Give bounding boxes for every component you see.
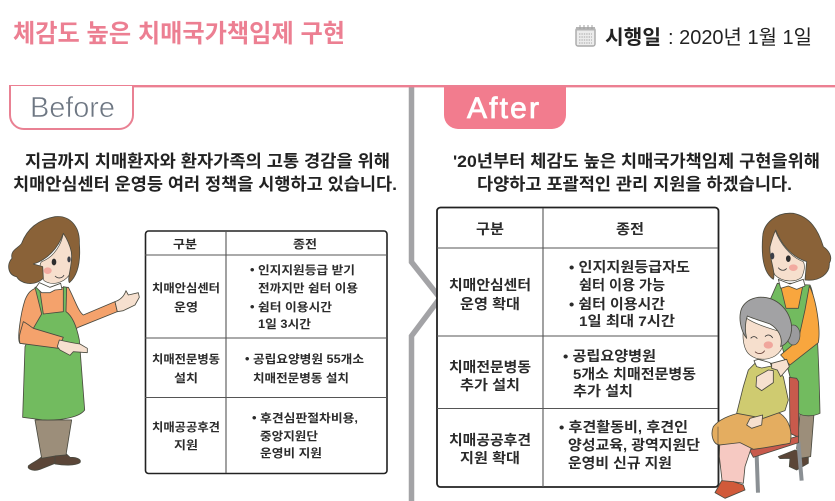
title: 체감도 높은 치매국가책임제 구현 — [13, 20, 345, 48]
row: dementia hospital addition: 5개소 치매전문병동 — [573, 366, 696, 382]
row: dementia centre expansion: • 쉼터 이용시간 — [569, 296, 665, 312]
effective date — [576, 25, 812, 49]
row: public guardianship: 중앙지원단 — [260, 429, 318, 443]
row: dementia centre: 운영 — [174, 301, 198, 314]
before intro text: 지금까지 치매환자와 환자가족의 고통 경감을 위해 — [25, 152, 390, 171]
row: dementia hospital addition — [449, 348, 696, 399]
row: dementia hospital: 치매전문병동 — [152, 352, 220, 366]
row: dementia hospital addition: 치매전문병동 — [449, 359, 531, 375]
row: public guardianship expansion — [449, 419, 700, 471]
row: public guardianship: • 후견심판절차비용, — [252, 411, 358, 425]
row: public guardianship expansion: 양성교육, 광역지원단 — [568, 437, 700, 453]
divider: gray arrow line — [412, 87, 440, 501]
before tab — [10, 86, 133, 129]
after tab — [444, 87, 566, 129]
row: dementia centre: 1일 3시간 — [258, 317, 311, 331]
row: dementia centre: • 쉼터 이용시간 — [250, 301, 332, 314]
effective date: 시행일 — [605, 26, 661, 49]
after intro text: '20년부터 체감도 높은 치매국가책임제 구현을위해 — [453, 152, 820, 171]
row: dementia hospital addition: 추가 설치 — [460, 377, 520, 393]
effective date: : 2020년 1월 1일 — [668, 26, 812, 49]
row: public guardianship expansion: 운영비 신규 지원 — [568, 455, 672, 471]
row: dementia hospital: 설치 — [174, 372, 198, 385]
row: dementia centre expansion: 운영 확대 — [460, 296, 520, 312]
row: public guardianship: 운영비 지원 — [260, 446, 322, 460]
after intro text: 다양하고 포괄적인 관리 지원을 하겠습니다. — [477, 175, 792, 194]
row: dementia centre: • 인지지원등급 받기 — [250, 263, 355, 277]
row: dementia hospital addition: 추가 설치 — [573, 383, 633, 399]
row: dementia centre: 치매안심센터 — [152, 281, 220, 295]
before table header — [173, 238, 317, 251]
after tab: After — [467, 92, 539, 125]
icon: calendar — [576, 25, 595, 46]
row: dementia hospital: • 공립요양병원 55개소 — [245, 352, 364, 366]
row: dementia hospital: 치매전문병동 설치 — [253, 371, 349, 385]
row: public guardianship expansion: • 후견활동비, 후견인 — [559, 419, 688, 435]
before intro text — [13, 152, 397, 194]
after intro text — [453, 152, 820, 194]
row: dementia centre — [152, 263, 358, 331]
row: dementia centre expansion: • 인지지원등급자도 — [569, 259, 690, 275]
before tab: Before — [30, 92, 115, 124]
row: public guardianship — [152, 411, 358, 460]
after table — [437, 208, 718, 487]
after table header: 종전 — [616, 221, 644, 237]
after table header — [476, 221, 644, 237]
row: dementia centre: 전까지만 쉼터 이용 — [258, 281, 358, 295]
row: dementia centre expansion — [449, 259, 690, 329]
row: public guardianship: 지원 — [174, 438, 198, 452]
row: public guardianship expansion: 치매공공후견 — [449, 432, 531, 448]
row: dementia hospital — [152, 352, 364, 385]
before table — [145, 231, 387, 474]
illustration: caregiver with elderly woman on chair — [712, 213, 831, 498]
before table header: 구분 — [173, 238, 197, 251]
row: dementia hospital addition: • 공립요양병원 — [563, 348, 656, 364]
row: dementia centre expansion: 쉼터 이용 가능 — [579, 277, 665, 293]
row: public guardianship expansion: 지원 확대 — [460, 450, 520, 466]
header rule — [9, 85, 835, 87]
row: dementia centre expansion: 1일 최대 7시간 — [579, 313, 675, 329]
row: public guardianship: 치매공공후견 — [152, 420, 220, 434]
illustration: presenting caregiver — [9, 217, 139, 470]
before table header: 종전 — [293, 238, 317, 251]
before intro text: 치매안심센터 운영등 여러 정책을 시행하고 있습니다. — [13, 175, 397, 194]
after table header: 구분 — [476, 221, 504, 237]
row: dementia centre expansion: 치매안심센터 — [449, 277, 531, 293]
